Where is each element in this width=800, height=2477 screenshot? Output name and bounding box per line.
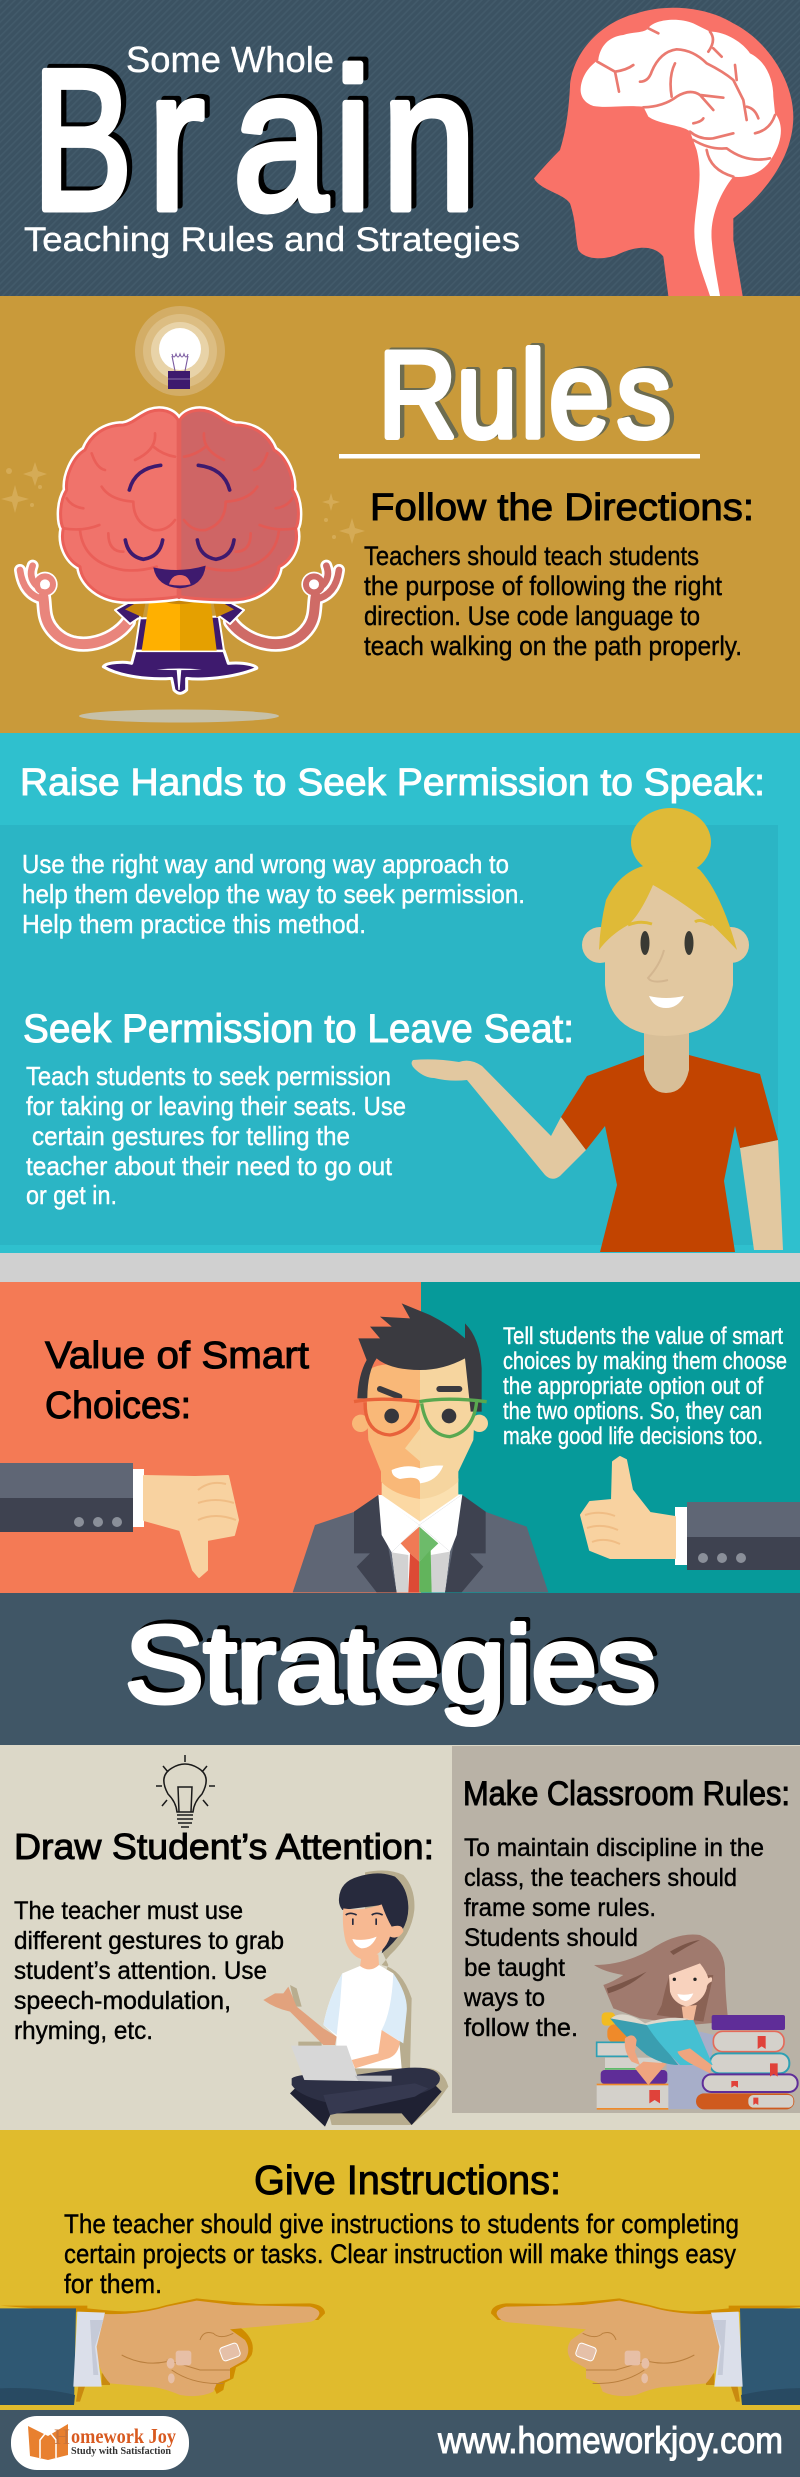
text: make classroom rules: ways to [463,1984,545,2012]
heading: rules: Rules [383,324,675,462]
text: draw student's attention: rhyming, etc. [14,2017,153,2045]
text: give instructions [64,2209,739,2299]
text: follow the directions: teach walking on the path properly. [364,631,742,661]
title: brain: rain [153,25,481,248]
illustration: teacher woman [412,808,783,1252]
text: draw student's attention: speech-modulation, [14,1987,231,2015]
panel: make classroom rules [452,1746,800,2113]
arms [20,566,339,644]
illustration: student with laptop [263,1871,448,2127]
text: make classroom rules: Students should [464,1924,638,1952]
heading: strategies: Strategies [129,1600,660,1722]
heading: value of smart choices [45,1335,309,1427]
heading: raise hands: Raise Hands to Seek Permission to Speak: [20,762,765,804]
illustration: man with glasses [293,1303,548,1592]
text: follow the directions: the purpose of following the right [364,571,722,601]
icon: thumbs up [581,1457,800,1570]
panel: give instructions [0,2130,800,2410]
text: give instructions: The teacher should give instructions to students for completing [64,2209,739,2239]
divider band [0,1253,800,1282]
text: draw student's attention: student’s attention. Use [14,1957,267,1985]
decorative sparkles [1,462,365,544]
heading: strategies: Strategies [125,1604,656,1726]
panel: value of smart choices [0,1282,800,1593]
text: leave seat: Teach students to seek permission [26,1061,391,1091]
text: make classroom rules: class, the teachers should [464,1864,737,1892]
text: make classroom rules [463,1834,764,2042]
icon: pointing hand right [491,2298,800,2405]
icon: outline light bulb [156,1755,215,1827]
logo wordmark: omework Joy [71,2424,176,2448]
panel: strategies heading [0,1593,800,1745]
heading: value of smart choices: Value of Smart [45,1335,309,1377]
text: give instructions: certain projects or tasks. Clear instruction will make things easy [64,2239,736,2269]
text: make classroom rules: To maintain discipline in the [464,1834,764,1862]
subtitle: Teaching Rules and Strategies [24,221,520,259]
panel: header [0,0,800,296]
text: leave seat: teacher about their need to go out [26,1151,393,1181]
logo tagline: Study with Satisfaction [71,2445,171,2457]
heading: leave seat: Seek Permission to Leave Seat: [23,1007,574,1051]
illustration: meditating brain character [20,410,339,693]
heading: draw student's attention: Draw Student’s Attention: [14,1826,434,1867]
panel: raise hands and leave seat [0,733,800,1253]
title: brain: rain [148,29,476,252]
text: raise hands: Use the right way and wrong way approach to [22,849,509,879]
heading: follow the directions: Follow the Directions: [370,487,754,529]
text: raise hands: Help them practice this method. [22,909,366,939]
logo [11,2416,189,2470]
text: value of smart choices: the appropriate option out of [503,1373,763,1400]
text: draw student's attention [14,1897,284,2045]
text: draw student's attention: The teacher must use [14,1897,243,1925]
text: raise hands [22,849,525,939]
title: brain: B [38,25,138,248]
icon: pointing hand left [0,2298,325,2405]
text: raise hands: help them develop the way to seek permission. [22,879,525,909]
torso [115,592,244,651]
illustration: girl reading with books [594,1934,798,2110]
panel: draw student's attention [0,1745,800,2130]
heading: give instructions: Give Instructions: [254,2157,561,2203]
face [125,465,234,559]
text: make classroom rules: be taught [464,1954,565,1982]
text: leave seat: or get in. [26,1180,117,1210]
text: leave seat: certain gestures for telling the [32,1121,350,1151]
title: brain: B [32,29,132,252]
brain head [61,410,298,600]
heading: value of smart choices: Choices: [45,1385,191,1427]
title: some whole: Some Whole [126,39,334,80]
rule line [339,454,700,458]
text: leave seat [26,1061,406,1210]
text: give instructions: for them. [64,2269,162,2299]
text: follow the directions: direction. Use code language to [364,601,700,631]
legs [103,651,257,693]
icon: thumbs down [0,1463,238,1577]
text: make classroom rules: frame some rules. [464,1894,656,1922]
icon: light bulb [135,306,225,396]
text: make classroom rules: follow the. [464,2014,578,2042]
icon: head with brain [534,8,793,296]
text: draw student's attention: different gestures to grab [14,1927,284,1955]
heading: rules: Rules [378,326,671,464]
text: leave seat: for taking or leaving their seats. Use [26,1091,406,1121]
panel: rules [0,296,800,733]
text: follow the directions: Teachers should teach students [364,541,699,571]
icon: book logo: H [54,2424,70,2449]
shadow under character [79,710,279,722]
text: follow the directions [364,541,742,661]
panel: footer [0,2410,800,2477]
text: value of smart choices [503,1323,787,1450]
icon: book logo [28,2424,70,2460]
